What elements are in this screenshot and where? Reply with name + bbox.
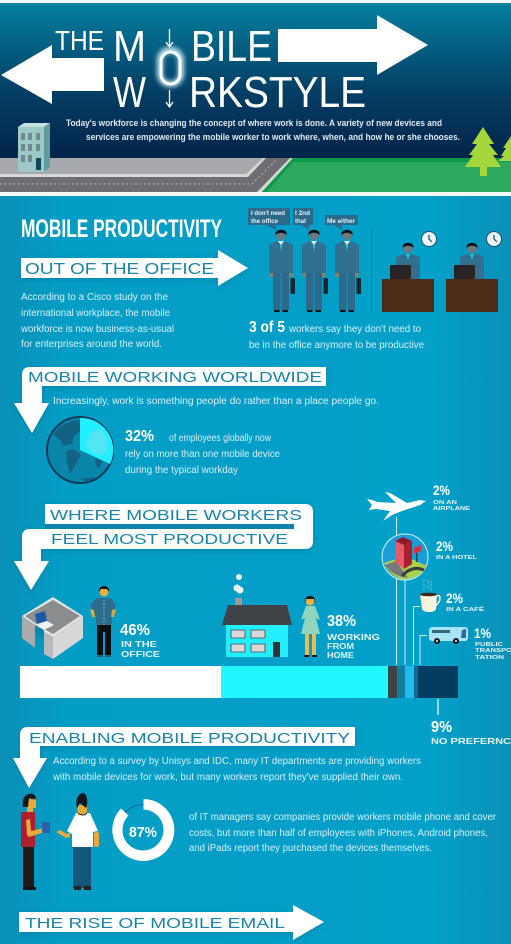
text: 38% working from home [327, 613, 380, 660]
label: public transportation: TRANSPO [475, 648, 511, 654]
arrow heading: out of the office [21, 250, 248, 286]
speech bubbles: I 2nd [295, 210, 310, 217]
text: 3 of 5: workers say they don't need to [288, 324, 421, 335]
title: BILE [191, 22, 272, 71]
arrow heading: mobile working worldwide [14, 367, 326, 433]
text: 32% [125, 428, 280, 476]
text: IT managers [189, 812, 497, 854]
text: survey: According to a survey by Unisys and IDC, many IT departments are providing workers [53, 756, 421, 767]
text: IT managers: costs, but more than half of employees with iPhones, Android phones, [189, 828, 488, 839]
label: no preference: 9% [431, 719, 452, 736]
figure: man in white shirt [56, 793, 99, 890]
label: cafe: IN A CAFÉ [446, 605, 484, 613]
label: hotel: IN A HOTEL [436, 555, 478, 561]
text: 38% working from home: FROM [327, 642, 354, 651]
text: 46% in the office: 46% [120, 622, 150, 639]
label: hotel: 2% [436, 538, 453, 554]
label: airplane: AIRPLANE [433, 506, 470, 512]
text: 32%: rely on more than one mobile device [125, 449, 280, 460]
road [0, 158, 293, 192]
label: public transportation [474, 625, 511, 661]
speech bubbles: the office [251, 218, 278, 225]
label: public transportation: TATION [475, 655, 504, 661]
arrow heading: where mobile workers feel most productive: WHERE MOBILE WORKERS [50, 507, 302, 524]
text: 3 of 5: 3 of 5 [249, 319, 285, 336]
text: IT managers: and iPads report they purchased the devices themselves. [189, 843, 432, 854]
text: cisco study: for enterprises around the world. [21, 339, 162, 350]
text: 46% in the office: OFFICE [121, 650, 161, 659]
figure: home worker [301, 596, 320, 657]
title: RKSTYLE [189, 68, 366, 117]
arrow heading: the rise of mobile email: THE RISE OF MOBILE EMAIL [25, 915, 285, 932]
chart: 87% donut: 87% [129, 824, 157, 841]
arrow: left [1, 45, 104, 104]
text: 3 of 5 [249, 319, 424, 351]
text: cisco study: According to a Cisco study on the [21, 292, 168, 303]
title: W [113, 68, 146, 117]
heading: mobile productivity: MOBILE PRODUCTIVITY [21, 215, 222, 243]
text: cisco study: international workplace, the mobile [21, 308, 170, 319]
text: survey: with mobile devices for work, but many workers report they've supplied their own. [52, 772, 403, 783]
text: IT managers: of IT managers say companies provide workers mobile phone and cover [189, 812, 497, 823]
text: worldwide intro: Increasingly, work is something people do rather than a place people go. [53, 396, 379, 407]
label: hotel [436, 538, 478, 561]
text: 38% working from home: WORKING [327, 633, 380, 642]
standing workers [269, 230, 361, 312]
icon: hotel [382, 534, 428, 580]
leader lines [396, 517, 438, 715]
title: THE [55, 25, 104, 56]
text: cisco study: workforce is now business-as-usual [20, 324, 174, 335]
seated workers [382, 232, 502, 312]
icon: building [18, 123, 50, 172]
figure: man with phone [21, 794, 50, 890]
icon: coffee cup [420, 579, 440, 612]
text: 38% working from home: HOME [327, 651, 355, 660]
text: 3 of 5: be in the office anymore to be productive [249, 340, 424, 351]
text: 46% in the office [120, 622, 161, 659]
arrow heading: enabling mobile productivity: ENABLING MOBILE PRODUCTIVITY [29, 730, 350, 747]
text: cisco study [20, 292, 174, 350]
lawn [262, 158, 511, 192]
speech bubbles: that [295, 218, 307, 225]
label: cafe: 2% [446, 590, 463, 606]
stacked bar chart [20, 666, 458, 698]
text: 32%: during the typical workday [125, 465, 238, 476]
icon: office cubicle [22, 597, 83, 659]
arrow heading: the rise of mobile email [19, 905, 324, 940]
label: airplane: ON AN [433, 500, 457, 506]
icon: airplane [367, 492, 426, 521]
icon: globe [47, 417, 113, 483]
arrow heading: enabling mobile productivity [13, 727, 355, 788]
label: public transportation: 1% [474, 625, 491, 641]
arrow heading: out of the office: OUT OF THE OFFICE [25, 261, 214, 278]
speech bubbles: Me either [327, 218, 355, 225]
title [55, 22, 366, 117]
text: 38% working from home: 38% [327, 613, 356, 630]
label: public transportation: PUBLIC [475, 642, 503, 648]
label: airplane: 2% [433, 482, 450, 498]
label: airplane [433, 482, 470, 512]
text: 32%: 32% [125, 428, 154, 445]
label: no preference: NO PREFERNC [431, 736, 511, 746]
chart: 87% donut [112, 799, 174, 861]
arrow heading: mobile working worldwide: MOBILE WORKING WORLDWIDE [28, 369, 322, 386]
text: 46% in the office: IN THE [121, 640, 158, 649]
intro text: Today's workforce is changing the concept of where work is done. A variety of new devices and [66, 118, 442, 128]
title: M [113, 22, 146, 71]
label: no preference [431, 719, 511, 746]
figure: office worker [90, 586, 116, 657]
arrow: right [278, 15, 428, 75]
label: cafe [446, 590, 484, 613]
arrow heading: where mobile workers feel most productive: FEEL MOST PRODUCTIVE [51, 531, 288, 548]
speech bubbles [248, 208, 358, 230]
speech bubbles: I don't need [251, 210, 285, 217]
text: 32%: of employees globally now [169, 433, 272, 444]
arrow heading: where mobile workers feel most productive [14, 504, 313, 590]
icon: house [222, 574, 292, 657]
intro text: services are empowering the mobile worker to work where, when, and how he or she chooses. [86, 132, 460, 142]
panel: header [0, 0, 511, 196]
text: survey [52, 756, 421, 783]
icon: trees [465, 127, 511, 176]
icon: bus [429, 627, 468, 644]
intro text [66, 118, 460, 142]
